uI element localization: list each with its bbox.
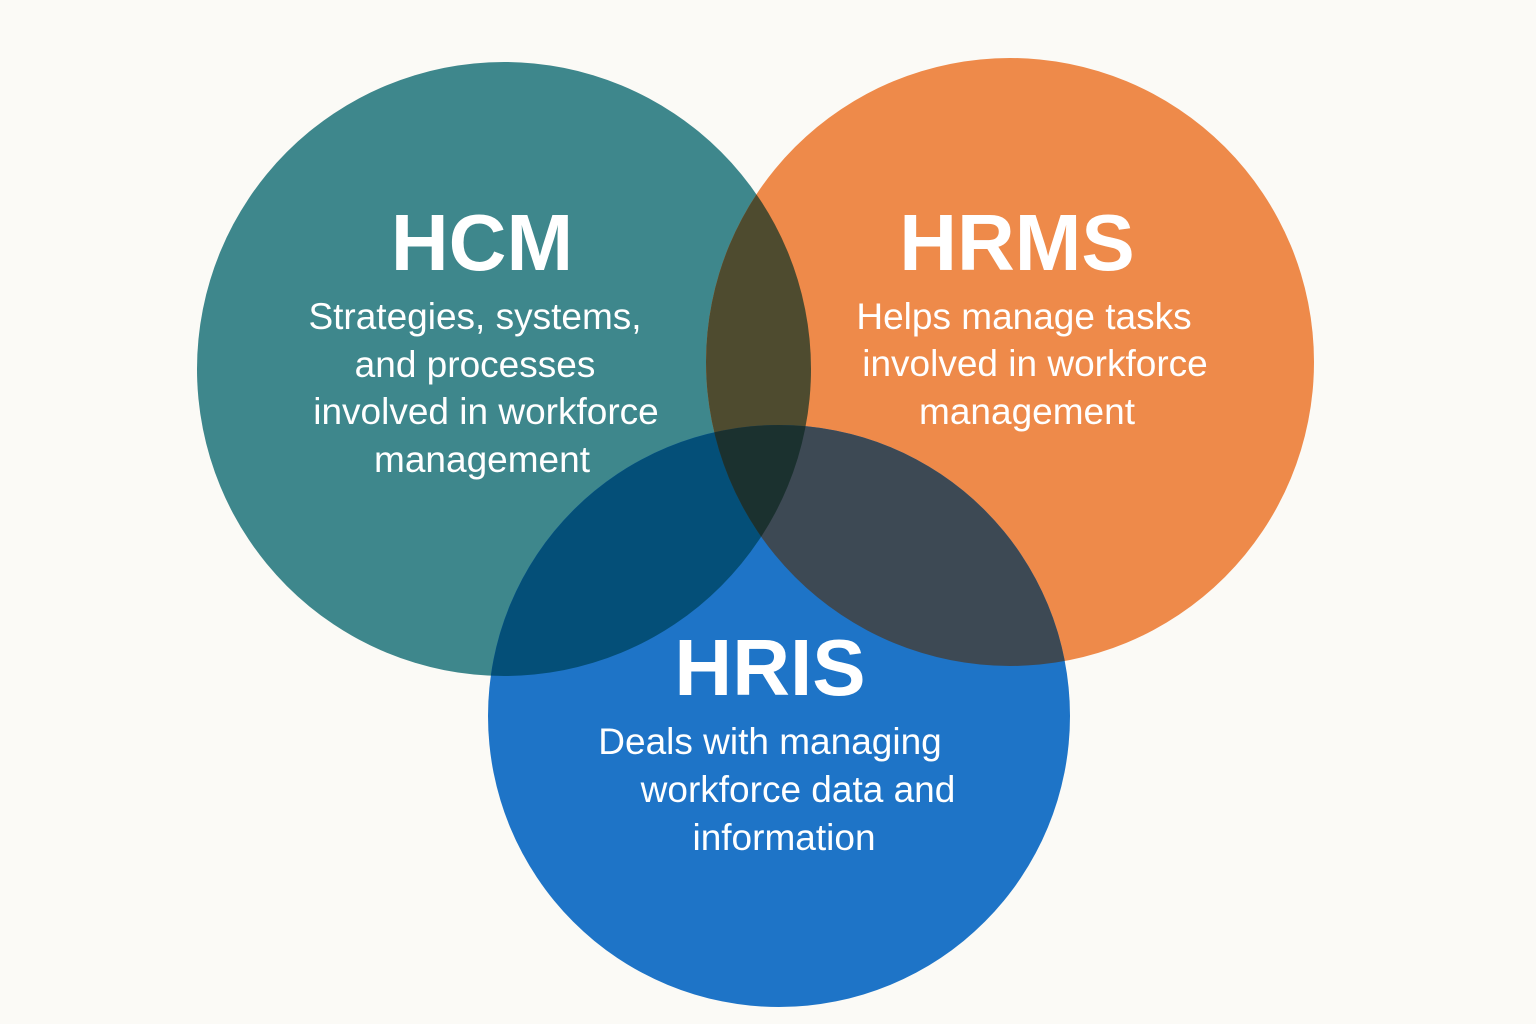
HRIS label	[598, 623, 955, 858]
description: HRMS: Helps manage tasks	[856, 296, 1192, 337]
HCM label	[308, 198, 659, 480]
circle: HCM	[197, 62, 811, 676]
description: HCM: management	[374, 439, 591, 480]
overlap: HCM and HRIS	[490, 425, 801, 676]
description: HRIS	[598, 721, 955, 858]
description: HRIS: workforce data and	[640, 769, 955, 810]
title: HCM: HCM	[391, 198, 573, 287]
description: HRMS: involved in workforce	[862, 343, 1208, 384]
description: HCM: and processes	[355, 344, 595, 385]
overlap: HCM and HRMS	[706, 194, 811, 432]
description: HRIS: Deals with managing	[598, 721, 942, 762]
description: HCM	[308, 296, 659, 480]
description: HRMS	[856, 296, 1208, 432]
circle: HRMS	[706, 58, 1314, 666]
circle: HRIS	[488, 425, 1070, 1007]
description: HRMS: management	[919, 391, 1136, 432]
overlap: all three	[714, 425, 806, 537]
title: HRIS: HRIS	[674, 623, 866, 712]
description: HCM: involved in workforce	[313, 391, 659, 432]
description: HCM: Strategies, systems,	[308, 296, 642, 337]
title: HRMS: HRMS	[899, 198, 1135, 287]
venn diagram	[197, 58, 1314, 1007]
description: HRIS: information	[692, 817, 876, 858]
overlap: HRMS and HRIS	[714, 426, 1065, 666]
HRMS label	[856, 198, 1208, 432]
